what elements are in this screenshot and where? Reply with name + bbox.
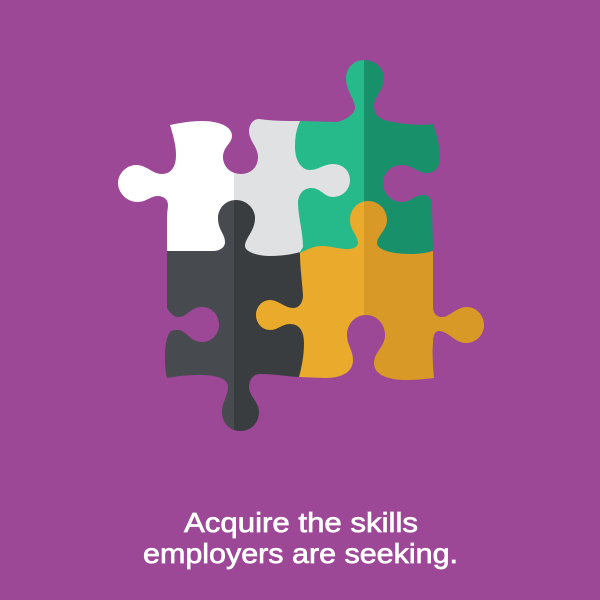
puzzle piece: yellow — [252, 198, 488, 383]
puzzle piece: dark grey — [165, 200, 304, 431]
caption: Acquire the skills — [184, 507, 418, 538]
puzzle piece: green — [295, 60, 440, 254]
caption: employers are seeking. — [143, 538, 458, 569]
puzzle piece: white and light grey — [114, 115, 354, 260]
puzzle illustration — [114, 55, 488, 435]
infographic canvas — [118, 60, 484, 570]
caption — [143, 507, 458, 569]
